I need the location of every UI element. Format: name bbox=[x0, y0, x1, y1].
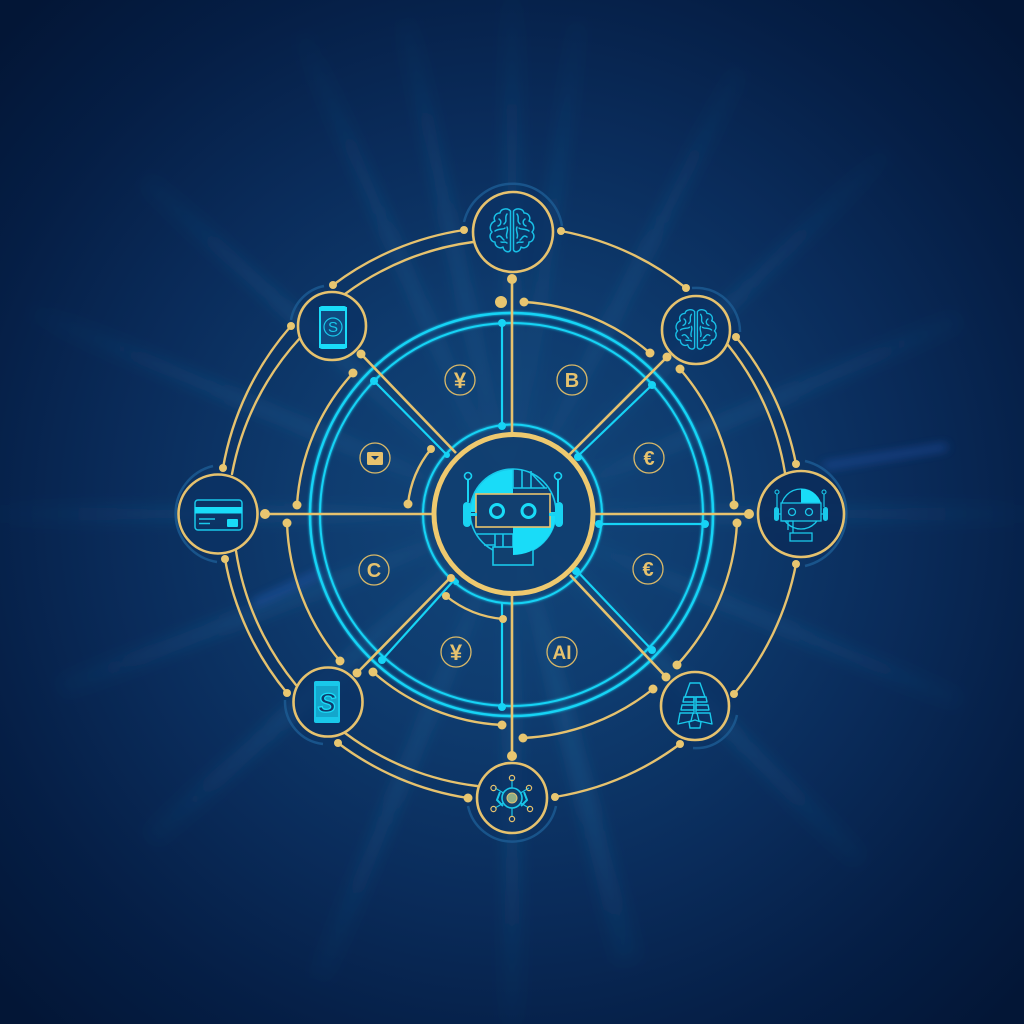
currency badges: AI bbox=[552, 643, 572, 664]
currency badges: ¥ bbox=[450, 640, 463, 665]
node: upper left phone: S bbox=[328, 319, 338, 336]
currency badges: C bbox=[367, 560, 381, 582]
currency badges: € bbox=[642, 559, 654, 581]
node: left credit card bbox=[178, 474, 258, 554]
node halo arcs bbox=[176, 184, 846, 842]
currency badges: ¥ bbox=[454, 368, 467, 393]
currency badges bbox=[359, 365, 664, 667]
node: lower right tower bbox=[661, 672, 729, 740]
accent streaks bbox=[255, 447, 945, 603]
cyan rings bbox=[310, 313, 713, 716]
node: right robot bbox=[758, 471, 844, 557]
gold outer and middle arcs bbox=[223, 230, 796, 798]
node: lower left phone bbox=[294, 668, 362, 736]
gold junction dots bbox=[219, 226, 800, 802]
node: bottom network bbox=[477, 763, 547, 833]
node: upper right brain bbox=[662, 296, 730, 364]
node: upper left phone bbox=[298, 292, 366, 360]
icon: central robot bbox=[463, 469, 563, 565]
central hub ring bbox=[434, 434, 593, 594]
currency badges: B bbox=[565, 370, 579, 392]
node: top brain bbox=[473, 192, 553, 272]
node: lower left phone: S bbox=[318, 688, 336, 718]
currency badges: € bbox=[643, 448, 655, 470]
gold spokes bbox=[265, 280, 749, 755]
cyan spokes bbox=[370, 319, 709, 711]
